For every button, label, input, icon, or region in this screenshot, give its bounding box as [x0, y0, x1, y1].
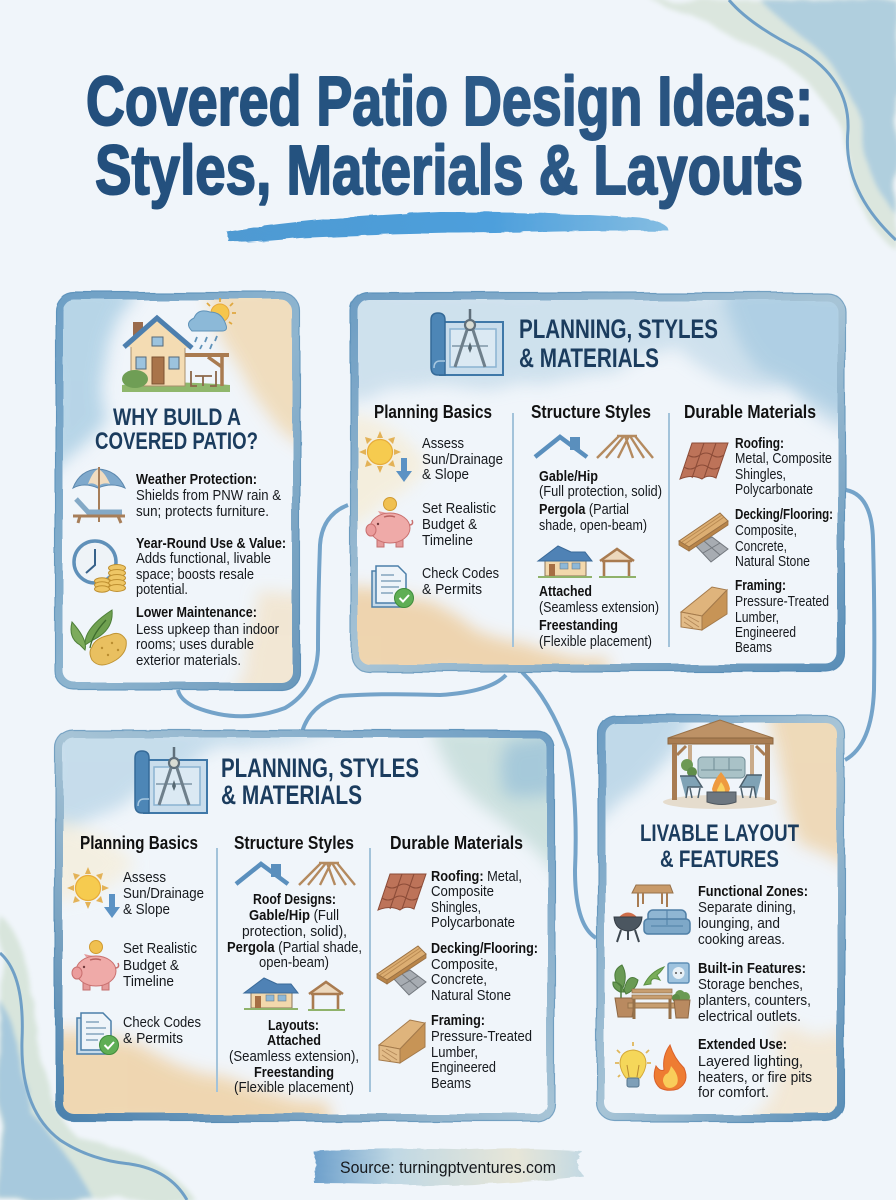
text: decking: Decking/Flooring:	[735, 506, 833, 523]
text: roof designs	[227, 891, 362, 971]
text: budget: Timeline	[123, 973, 174, 990]
text: decking: Decking/Flooring:	[431, 940, 538, 957]
icon: attached house	[538, 546, 592, 577]
text: decking: Concrete,	[431, 971, 487, 988]
text: roof styles: (Full protection, solid)	[539, 483, 662, 500]
text: layouts: Attached	[267, 1032, 321, 1049]
text: extended use: Extended Use:	[698, 1036, 787, 1053]
panel frame	[56, 730, 554, 1122]
heading: PLANNING, STYLES	[519, 314, 718, 344]
text: functional zones: Separate dining,	[698, 899, 796, 916]
icon: pergola rafters	[597, 436, 653, 458]
text: functional zones: lounging, and	[698, 915, 780, 932]
text: budget: Set Realistic	[123, 940, 197, 957]
text: framing: Pressure-Treated	[431, 1028, 532, 1045]
text: year-round use and value: space; boosts resale	[136, 566, 254, 583]
text: weather protection: Weather Protection:	[136, 471, 257, 488]
text: assess: Sun/Drainage	[123, 885, 204, 902]
panel: planning, styles and materials (bottom)	[45, 722, 565, 1130]
text: assess: & Slope	[123, 901, 170, 918]
heading: & FEATURES	[660, 846, 779, 873]
panel frame	[350, 292, 844, 672]
icon: leaves and sponge	[71, 610, 126, 665]
icon: freestanding structure	[599, 549, 636, 577]
text: budget: Set Realistic	[422, 500, 496, 517]
text: framing: Beams	[431, 1075, 471, 1092]
panel frame	[56, 292, 300, 690]
connector lines	[178, 490, 874, 938]
text: lower maintenance: exterior materials.	[136, 652, 241, 669]
icon: blueprint and compass	[135, 747, 207, 813]
text: roofing: Shingles,	[735, 466, 786, 483]
text: roof designs: Roof Designs:	[253, 891, 336, 908]
text: weather protection	[136, 471, 281, 520]
column: planning basics: Planning Basics	[374, 402, 492, 422]
icon: gable roof	[236, 864, 288, 884]
text: codes: & Permits	[422, 581, 482, 598]
heading	[221, 753, 419, 810]
text: lower maintenance: Lower Maintenance:	[136, 604, 257, 621]
icon: sun and drainage arrow	[359, 431, 412, 482]
text: layouts: Attached	[539, 583, 592, 600]
text: framing: Lumber,	[431, 1044, 478, 1061]
text: decking	[431, 940, 538, 1004]
text: framing: Pressure-Treated	[735, 593, 829, 610]
column: structure styles: Structure Styles	[531, 402, 651, 422]
column: planning basics	[359, 402, 503, 608]
text: built-in features: Storage benches,	[698, 976, 803, 993]
text: year-round use and value: potential.	[136, 581, 188, 598]
text: roof designs: open-beam)	[259, 954, 329, 971]
heading: & MATERIALS	[519, 343, 659, 373]
text: layouts	[229, 1017, 359, 1096]
text: codes	[422, 565, 499, 598]
column: planning basics: Planning Basics	[80, 833, 198, 853]
title brush underline	[227, 212, 669, 242]
icon: light bulb and flame	[615, 1042, 686, 1090]
text: layouts: (Seamless extension),	[229, 1048, 359, 1065]
icon: blueprint and compass	[431, 309, 503, 375]
text: roof styles: Gable/Hip	[539, 468, 598, 485]
text: built-in features: electrical outlets.	[698, 1008, 801, 1025]
column: structure styles	[227, 833, 362, 1096]
heading: & MATERIALS	[221, 780, 362, 810]
text: framing: Framing:	[431, 1012, 485, 1029]
icon: decking and pavers	[679, 513, 728, 562]
text: codes	[123, 1014, 201, 1047]
text: roof designs: Gable/Hip (Full	[249, 907, 339, 924]
text: decking: Natural Stone	[431, 987, 511, 1004]
text: functional zones: cooking areas.	[698, 931, 785, 948]
icon: attached house	[244, 978, 298, 1009]
icon: permit document	[372, 566, 414, 608]
text: framing: Lumber,	[735, 609, 779, 626]
text: roof designs: Pergola (Partial shade,	[227, 939, 362, 956]
text: roofing: Shingles,	[431, 899, 481, 916]
heading	[640, 820, 799, 873]
column: planning basics	[67, 833, 204, 1054]
column: structure styles: Structure Styles	[234, 833, 354, 853]
text: budget: Budget &	[422, 516, 477, 533]
text: codes: Check Codes	[422, 565, 499, 582]
icon: lumber beam	[379, 1020, 425, 1063]
panel background wash	[62, 298, 294, 683]
text: roofing: Polycarbonate	[431, 914, 515, 931]
column dividers	[513, 413, 669, 647]
column dividers	[217, 848, 370, 1092]
text: decking: Natural Stone	[735, 553, 810, 570]
text: built-in features: planters, counters,	[698, 992, 811, 1009]
text: assess	[422, 435, 503, 483]
text: roof styles: Pergola (Partial	[539, 501, 629, 518]
text: layouts: (Flexible placement)	[539, 633, 652, 650]
text: budget: Timeline	[422, 532, 473, 549]
icon: decking and pavers	[377, 946, 426, 995]
heading	[95, 404, 258, 455]
icon: gazebo with fire pit	[663, 720, 777, 809]
panel background wash	[62, 736, 548, 1116]
icon: roof tiles	[680, 443, 728, 479]
text: layouts: (Seamless extension)	[539, 599, 659, 616]
text: codes: Check Codes	[123, 1014, 201, 1031]
panel background wash	[606, 722, 838, 1115]
text: roof styles: shade, open-beam)	[539, 517, 647, 534]
text: roofing	[431, 868, 522, 931]
text: budget: Budget &	[123, 957, 179, 974]
text: lower maintenance: rooms; uses durable	[136, 636, 254, 653]
icon: clock and coins	[74, 541, 126, 592]
text: year-round use and value: Adds functional, livable	[136, 550, 271, 567]
icon: umbrella and lounger	[73, 467, 125, 523]
text: budget	[123, 940, 197, 990]
text: lower maintenance: Less upkeep than indoor	[136, 621, 279, 638]
text: roofing: Polycarbonate	[735, 481, 813, 498]
column: durable materials	[679, 402, 833, 656]
text: functional zones: Functional Zones:	[698, 883, 808, 900]
icon: permit document	[77, 1013, 118, 1054]
text: framing	[735, 577, 829, 656]
icon: roof tiles	[378, 874, 426, 910]
text: extended use: Layered lighting,	[698, 1053, 803, 1070]
panel frame	[598, 716, 844, 1122]
text: framing: Engineered	[431, 1059, 496, 1076]
text: assess: Assess	[422, 435, 464, 452]
heading	[519, 314, 718, 373]
heading: PLANNING, STYLES	[221, 753, 419, 783]
text: layouts	[539, 583, 659, 650]
text: roofing: Composite	[431, 883, 494, 900]
panel: livable layout and features	[587, 705, 855, 1130]
text: decking: Composite,	[431, 956, 498, 973]
watercolor corner: bottom left	[0, 915, 195, 1200]
text: framing: Beams	[735, 639, 772, 656]
text: roofing: Metal, Composite	[735, 450, 832, 467]
icon: house with patio	[122, 298, 236, 392]
icon: plants, bench and outlet	[613, 963, 690, 1019]
text: layouts: Freestanding	[254, 1064, 334, 1081]
title	[86, 62, 813, 209]
watercolor corner: top right	[650, 0, 896, 250]
text: roof styles	[539, 468, 662, 534]
source badge	[313, 1149, 584, 1186]
text: functional zones	[698, 883, 808, 948]
panel: why build a covered patio	[50, 285, 310, 700]
text: roofing	[735, 435, 832, 498]
text: decking: Concrete,	[735, 538, 787, 555]
column: durable materials: Durable Materials	[390, 833, 523, 853]
text: roof designs: protection, solid),	[242, 923, 347, 940]
column: durable materials: Durable Materials	[684, 402, 816, 422]
text: layouts: (Flexible placement)	[234, 1079, 354, 1096]
text: built-in features: Built-in Features:	[698, 960, 806, 977]
icon: lumber beam	[681, 587, 727, 630]
text: extended use: heaters, or fire pits	[698, 1069, 812, 1086]
column: structure styles	[531, 402, 662, 650]
icon: sun and drainage arrow	[67, 867, 120, 918]
source badge: Source: turningptventures.com	[340, 1158, 556, 1177]
panel: planning, styles and materials (top)	[340, 285, 855, 680]
text: roofing: Roofing: Metal,	[431, 868, 522, 885]
text: assess: & Slope	[422, 466, 469, 483]
text: codes: & Permits	[123, 1030, 183, 1047]
text: roofing: Roofing:	[735, 435, 784, 452]
icon: freestanding structure	[308, 982, 345, 1010]
heading: COVERED PATIO?	[95, 428, 258, 455]
text: weather protection: Shields from PNW rain &	[136, 487, 281, 504]
text: weather protection: sun; protects furniture.	[136, 503, 269, 520]
text: extended use: for comfort.	[698, 1084, 769, 1101]
heading: WHY BUILD A	[113, 404, 241, 431]
text: lower maintenance	[136, 604, 279, 669]
text: assess: Assess	[123, 869, 166, 886]
text: framing: Framing:	[735, 577, 786, 594]
text: assess	[123, 869, 204, 918]
icon: pergola rafters	[299, 863, 355, 885]
icon: gable roof	[535, 437, 587, 457]
text: budget	[422, 500, 496, 549]
panel background wash	[357, 299, 838, 665]
text: year-round use and value: Year-Round Use & Value:	[136, 535, 286, 552]
icon: table, grill and sofa	[614, 885, 690, 942]
text: framing	[431, 1012, 532, 1092]
icon: piggy bank	[72, 940, 119, 990]
text: decking: Composite,	[735, 522, 797, 539]
text: year-round use and value	[136, 535, 286, 598]
heading: LIVABLE LAYOUT	[640, 820, 799, 847]
text: built-in features	[698, 960, 811, 1025]
text: extended use	[698, 1036, 812, 1101]
icon: piggy bank	[366, 498, 413, 547]
text: assess: Sun/Drainage	[422, 451, 503, 468]
text: layouts: Freestanding	[539, 617, 618, 634]
text: decking	[735, 506, 833, 570]
column: durable materials	[377, 833, 538, 1092]
text: layouts: Layouts:	[268, 1017, 319, 1034]
text: framing: Engineered	[735, 624, 796, 641]
